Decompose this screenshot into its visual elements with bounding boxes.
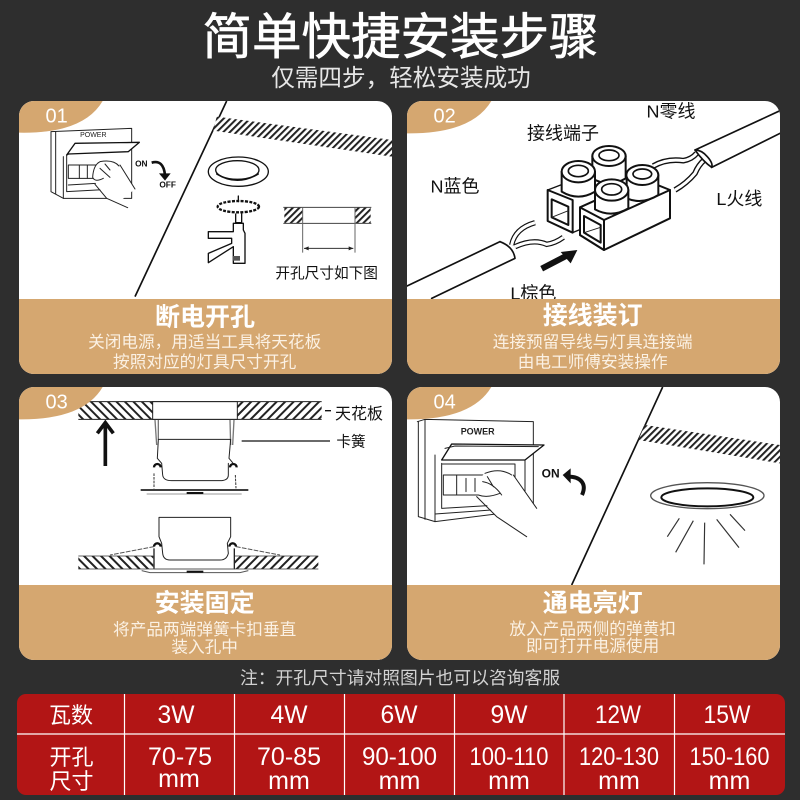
step badge [407,387,491,419]
row: wattage values: 3W [158,701,195,729]
icon: power box switching off: POWER [80,132,107,139]
step badge: 01 [46,106,68,128]
panel: step 01 [19,101,392,374]
row: hole size values: mm [379,767,420,795]
step badge [407,101,491,133]
table: hole sizes by wattage [17,694,785,795]
label: L brown: L棕色 [510,283,556,303]
row header: hole size [49,745,94,794]
icon: lamp ring [208,157,268,186]
diagonal divider [572,387,663,585]
lamp installed [78,517,318,573]
row: hole size values: 70-75 [148,743,212,771]
right cable [653,111,780,190]
row: wattage values: 9W [490,701,528,729]
caption band [407,299,780,374]
panel: step 03 [19,387,392,660]
icon: power box switching off: OFF [159,180,176,190]
step badge [19,387,103,419]
label: ceiling [325,405,382,421]
ceiling with hole [78,402,322,419]
label: N blue: N蓝色 [431,176,479,196]
icon: power box switching on: POWER [461,426,495,436]
label: spring clip [242,434,365,448]
label: N neutral: N零线 [647,101,695,121]
row: hole size values: 150-160 [690,743,770,771]
icon: lit lamp [651,483,764,564]
caption text: 连接预留导线与灯具连接端 [493,333,693,352]
panel: step 04 [407,387,780,660]
step badge: 04 [434,392,456,414]
row header: hole size: 开孔 [49,745,94,770]
note: 注：开孔尺寸请对照图片也可以咨询客服 [240,668,560,688]
caption text: 即可打开电源使用 [526,637,659,656]
caption title: 通电亮灯 [543,590,643,618]
icon: power box switching on [417,419,584,537]
row: hole size values: mm [709,767,750,795]
caption title: 接线装订 [543,302,643,330]
row: hole size values: mm [488,767,530,795]
caption text: 由电工师傅安装操作 [518,353,668,372]
panel: step 02 [407,101,780,374]
icon: hole saw [208,196,259,263]
label: spring clip: 卡簧 [336,433,366,450]
row: hole size values: 120-130 [579,743,659,771]
left cable [407,223,563,310]
caption text [493,333,693,372]
row: hole size values: 90-100 [362,743,437,771]
icon: power box switching off [51,128,176,208]
diagram: hole size [283,207,371,253]
label: terminal: 接线端子 [527,123,599,143]
caption text: 装入孔中 [171,637,238,656]
caption text: 将产品两端弹簧卡扣垂直 [113,620,296,639]
step badge [19,101,103,133]
caption text: 关闭电源，用适当工具将天花板 [88,333,322,352]
caption text: 按照对应的灯具尺寸开孔 [113,353,297,372]
arrow: up [97,423,113,466]
label: ceiling: 天花板 [335,405,383,423]
caption text [509,619,676,656]
icon: power box switching off: ON [135,159,148,169]
row: hole size values: 100-110 [470,743,548,771]
ceiling hatch [638,425,780,463]
row: wattage values [158,701,751,729]
label: hole size: 开孔尺寸如下图 [275,265,378,282]
row: hole size values: 70-85 [257,743,321,771]
label: L live: L火线 [716,189,762,209]
caption band [407,585,780,660]
title: 简单快捷安装步骤 [202,10,598,65]
lamp before install [141,420,248,494]
row: wattage values: 12W [595,701,641,729]
ceiling hatch [213,117,392,157]
row: hole size values: mm [598,767,640,795]
caption title: 安装固定 [155,590,255,618]
row: hole size values: mm [158,765,200,793]
subtitle: 仅需四步，轻松安装成功 [271,65,531,92]
caption text [113,620,296,656]
caption band [19,299,392,374]
row: hole size values: mm [268,767,310,795]
caption band [19,585,392,660]
row: wattage values: 6W [380,701,418,729]
caption title: 断电开孔 [155,304,255,332]
icon: power box switching on: ON [542,467,560,481]
row: hole size values [148,743,770,795]
icon: terminal connector [548,146,670,250]
caption text: 放入产品两侧的弹黄扣 [509,619,676,638]
row: wattage values: 15W [704,701,751,729]
diagonal divider [135,101,227,297]
caption text [88,333,322,372]
arrow: insert [542,250,577,269]
step badge: 02 [434,106,456,128]
row header: hole size: 尺寸 [49,769,94,794]
row: wattage values: 4W [270,701,308,729]
step badge: 03 [46,392,68,414]
row header: wattage: 瓦数 [49,703,93,728]
